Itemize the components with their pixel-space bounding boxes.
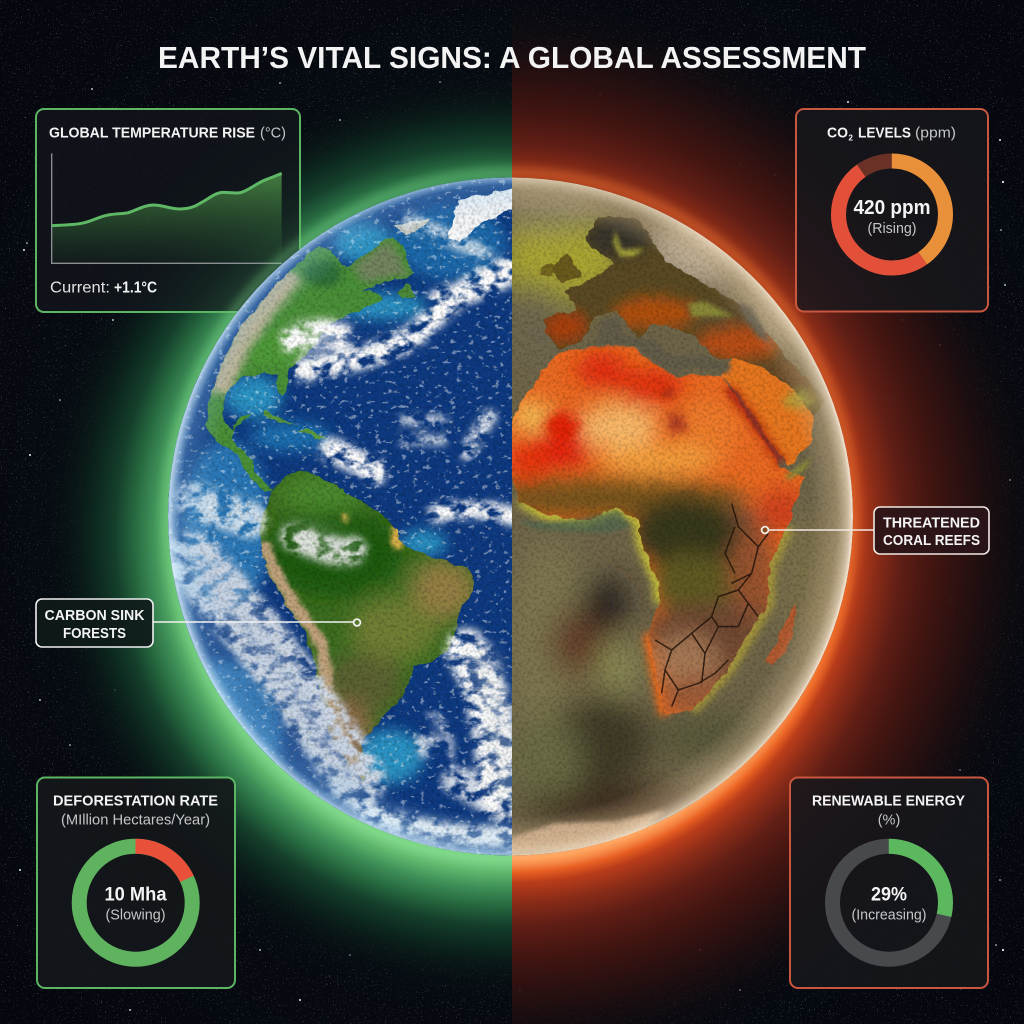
donut status: (Rising) bbox=[868, 221, 916, 237]
callout: threatened coral reefs bbox=[762, 507, 989, 554]
donut value: 10 Mha bbox=[104, 884, 167, 906]
land: Arabia and Africa bbox=[507, 345, 813, 715]
donut value: 420 ppm bbox=[854, 197, 930, 219]
planet glow: overheated red side bbox=[512, 0, 1024, 1024]
cloud systems bbox=[193, 220, 513, 837]
heading: co2 levels: (ppm) bbox=[915, 124, 956, 142]
heading: global temperature rise: GLOBAL TEMPERATURE RISE bbox=[49, 124, 255, 142]
healthy hemisphere: blue and green Earth bbox=[160, 170, 853, 870]
heading: co2 levels: CO bbox=[827, 124, 848, 142]
callout: threatened coral reefs: CORAL REEFS bbox=[883, 533, 980, 549]
land: Europe and Asia bbox=[540, 217, 825, 417]
donut chart: co2 bbox=[838, 161, 946, 268]
soft cloud haze bbox=[203, 337, 513, 840]
Antarctic edge bbox=[505, 810, 665, 853]
planet glow: healthy green side bbox=[0, 0, 512, 1024]
donut status: (Slowing) bbox=[106, 908, 166, 924]
limb halo bbox=[167, 172, 855, 860]
donut status: (Increasing) bbox=[852, 908, 926, 924]
Madagascar bbox=[765, 603, 797, 667]
line chart: temperature bbox=[52, 153, 282, 263]
drought cracks bbox=[655, 503, 768, 707]
heading: co2 levels: 2 bbox=[848, 134, 854, 142]
heading: co2 levels: LEVELS bbox=[858, 124, 911, 142]
Sahara hot spots bbox=[545, 387, 813, 463]
callout: carbon sink forests: CARBON SINK bbox=[44, 608, 145, 624]
donut value: 29% bbox=[871, 884, 907, 906]
heading: deforestation rate: DEFORESTATION RATE bbox=[53, 792, 218, 810]
ocean speckle clouds bbox=[160, 170, 512, 870]
shallow shelf water bbox=[170, 207, 507, 793]
land: North America and South America bbox=[205, 188, 513, 780]
donut chart: renewable share bbox=[832, 846, 946, 959]
North America shading bbox=[218, 240, 410, 393]
callout: threatened coral reefs: THREATENED bbox=[883, 516, 980, 532]
Europe shading bbox=[542, 217, 822, 387]
current value: +1.1°C bbox=[114, 280, 157, 296]
title: EARTH’S VITAL SIGNS: A GLOBAL ASSESSMENT bbox=[158, 40, 866, 75]
panel: renewable energy bbox=[790, 778, 988, 988]
subheading: units: (MIllion Hectares/Year) bbox=[61, 812, 210, 828]
heading: global temperature rise: (°C) bbox=[260, 124, 286, 142]
coastal halo bbox=[520, 500, 788, 715]
panel: deforestation rate bbox=[37, 778, 235, 988]
heading: renewable energy: RENEWABLE ENERGY bbox=[812, 792, 965, 810]
callout: carbon sink forests: FORESTS bbox=[63, 626, 126, 642]
panel: global temperature rise bbox=[36, 109, 300, 312]
seas and lakes bbox=[515, 230, 812, 533]
Africa shading bbox=[512, 346, 800, 715]
stressed hemisphere: overheated Earth bbox=[168, 170, 864, 870]
donut chart: deforestation bbox=[79, 846, 192, 959]
subheading: percent: (%) bbox=[878, 812, 900, 828]
South America shading bbox=[263, 473, 477, 777]
panel: co2 levels bbox=[796, 109, 988, 312]
globe bbox=[160, 170, 864, 870]
callout: carbon sink forests bbox=[36, 599, 360, 647]
current value: Current: bbox=[50, 280, 110, 296]
atmosphere and sea colour fields bbox=[495, 183, 835, 823]
